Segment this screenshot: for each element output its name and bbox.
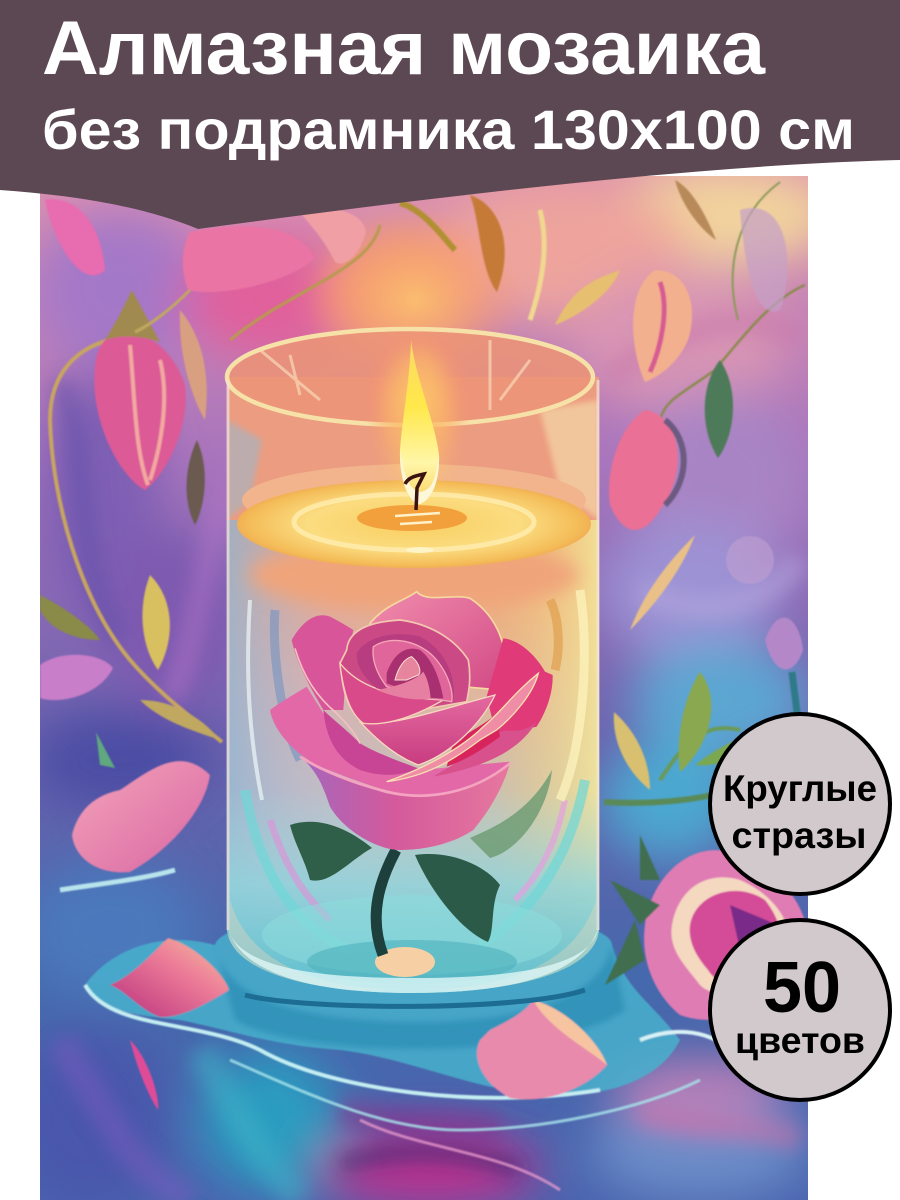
icon: hanging bud and stem on left [40,225,380,768]
background brush strokes [60,323,800,1200]
right petal [487,638,553,737]
icon: upper petals and leaves [45,180,805,720]
left back petal [292,615,353,710]
icon: rose in glass [270,592,553,955]
glass with candle [227,329,599,1006]
inner swirl [357,634,454,700]
badge: round rhinestones: стразы [732,815,866,856]
right front petal [387,673,538,782]
subtitle: без подрамника 130х100 см [42,98,855,161]
lower right petals [433,722,537,777]
title: Алмазная мозаика [42,6,766,91]
badge: 50 colours: цветов [735,1020,865,1061]
icon: fallen petals and water [60,761,740,1190]
back petal [370,592,506,690]
glass side reflections [245,590,585,950]
header banner [0,0,900,229]
icon: right flowering branch [603,672,742,807]
badge: round rhinestones: Круглые [723,768,877,809]
icon: pink rose lower right [605,835,809,1020]
large lower inner petal [340,663,443,724]
water around glass base [85,931,680,1093]
glass base ring [227,925,599,993]
icon: glass rim [227,329,593,425]
painting background [10,165,840,1200]
wax top surface [242,464,586,509]
cup [300,757,510,850]
icon: flame [384,340,452,510]
painting: candle with rose [10,165,840,1200]
inner bud outer [340,620,470,720]
badge: 50 colours: 50 [763,948,841,1028]
lower flare petal [270,687,510,798]
badge: round rhinestones [710,714,890,894]
center front petal [360,695,495,765]
lower-left wrap petal [323,710,418,775]
rose leaves and stem [290,770,552,955]
badge: 50 colours [710,920,890,1100]
